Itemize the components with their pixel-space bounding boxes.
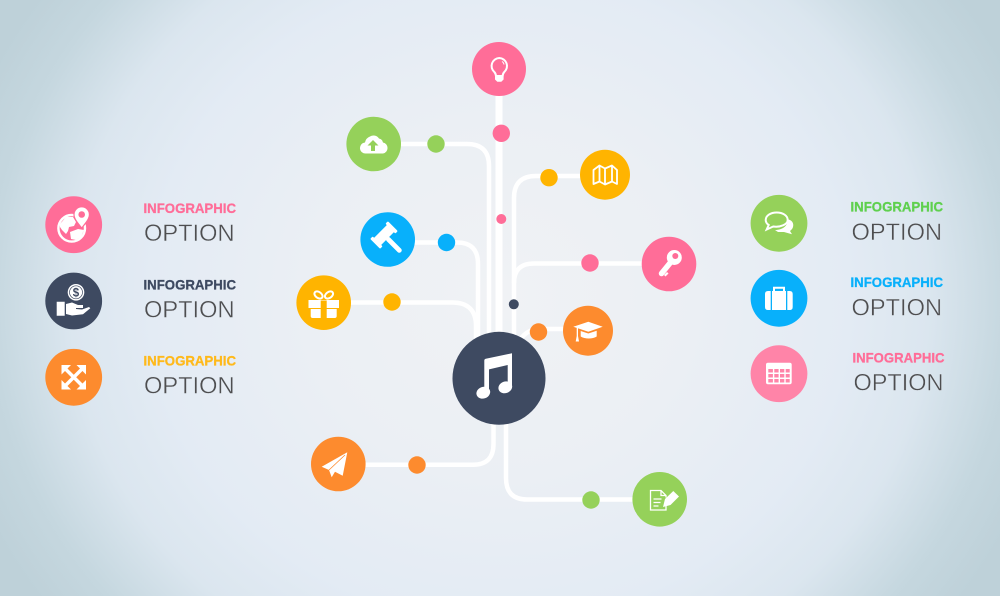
dot: green lower right bbox=[582, 491, 600, 509]
icon: document and pencil bbox=[650, 490, 679, 510]
node: document and pencil bbox=[632, 472, 687, 527]
icon: cloud upload bbox=[360, 135, 388, 154]
left option label 2: INFOGRAPHIC bbox=[144, 276, 236, 292]
node: gift bbox=[296, 275, 351, 330]
left option: globe bbox=[45, 196, 102, 253]
icon: light bulb bbox=[492, 58, 507, 82]
node: paper plane bbox=[311, 437, 366, 491]
icon: music note bbox=[475, 353, 514, 401]
left option label 2: OPTION bbox=[144, 296, 234, 323]
icon: map bbox=[594, 166, 617, 184]
dot: green upper left bbox=[427, 135, 445, 153]
dot: yellow left bbox=[383, 293, 401, 311]
left option label 3: OPTION bbox=[144, 372, 234, 399]
left option label 1 bbox=[144, 200, 236, 247]
left option label 1: OPTION bbox=[144, 220, 234, 247]
left option: money hand bbox=[45, 273, 102, 329]
right option: briefcase bbox=[751, 270, 807, 327]
right option label 2: OPTION bbox=[852, 294, 942, 321]
icon: briefcase bbox=[765, 288, 793, 310]
dot: pink large bbox=[493, 125, 510, 142]
right option label 1: INFOGRAPHIC bbox=[850, 199, 943, 215]
node: key bbox=[642, 237, 696, 291]
icon: gavel bbox=[370, 221, 410, 261]
icon: paper plane bbox=[322, 452, 347, 477]
left option label 3 bbox=[144, 352, 236, 399]
connector lines bbox=[324, 69, 669, 500]
right option label 2 bbox=[850, 274, 943, 321]
left option label 3: INFOGRAPHIC bbox=[144, 352, 236, 368]
dot: pink right bbox=[581, 254, 599, 272]
icon: chat bubbles bbox=[766, 212, 793, 234]
node: map bbox=[580, 150, 630, 200]
icon: key bbox=[662, 250, 682, 276]
icon: gift bbox=[308, 290, 339, 318]
dot: orange right bbox=[530, 323, 547, 341]
node: cloud upload bbox=[346, 117, 401, 171]
dot: navy small bbox=[509, 299, 519, 309]
node: gavel bbox=[360, 212, 415, 267]
dot: orange lower left bbox=[408, 456, 426, 474]
right option label 3: INFOGRAPHIC bbox=[852, 349, 944, 365]
left option: expand arrows bbox=[45, 349, 102, 406]
icon: expand arrows bbox=[62, 365, 86, 390]
left option label 1: INFOGRAPHIC bbox=[144, 200, 236, 216]
icon: hand with dollar coin: $ bbox=[73, 288, 80, 300]
left option label 2 bbox=[144, 276, 236, 323]
dot: pink small bbox=[496, 214, 506, 224]
right option: table bbox=[751, 345, 807, 402]
central music node bbox=[452, 332, 546, 425]
right option label 2: INFOGRAPHIC bbox=[850, 274, 943, 290]
node: graduation cap bbox=[563, 306, 613, 356]
right option label 3 bbox=[852, 349, 944, 397]
icon: table grid bbox=[766, 363, 792, 384]
dot: blue bbox=[438, 234, 455, 251]
right option label 1: OPTION bbox=[852, 219, 942, 246]
node: light bulb bbox=[472, 42, 526, 96]
right option label 3: OPTION bbox=[854, 370, 944, 397]
icon: graduation cap bbox=[573, 322, 603, 342]
right option: chat bbox=[751, 195, 807, 252]
icon: globe with pin bbox=[58, 207, 89, 242]
right option label 1 bbox=[850, 199, 943, 246]
dot: yellow right bbox=[540, 169, 558, 186]
